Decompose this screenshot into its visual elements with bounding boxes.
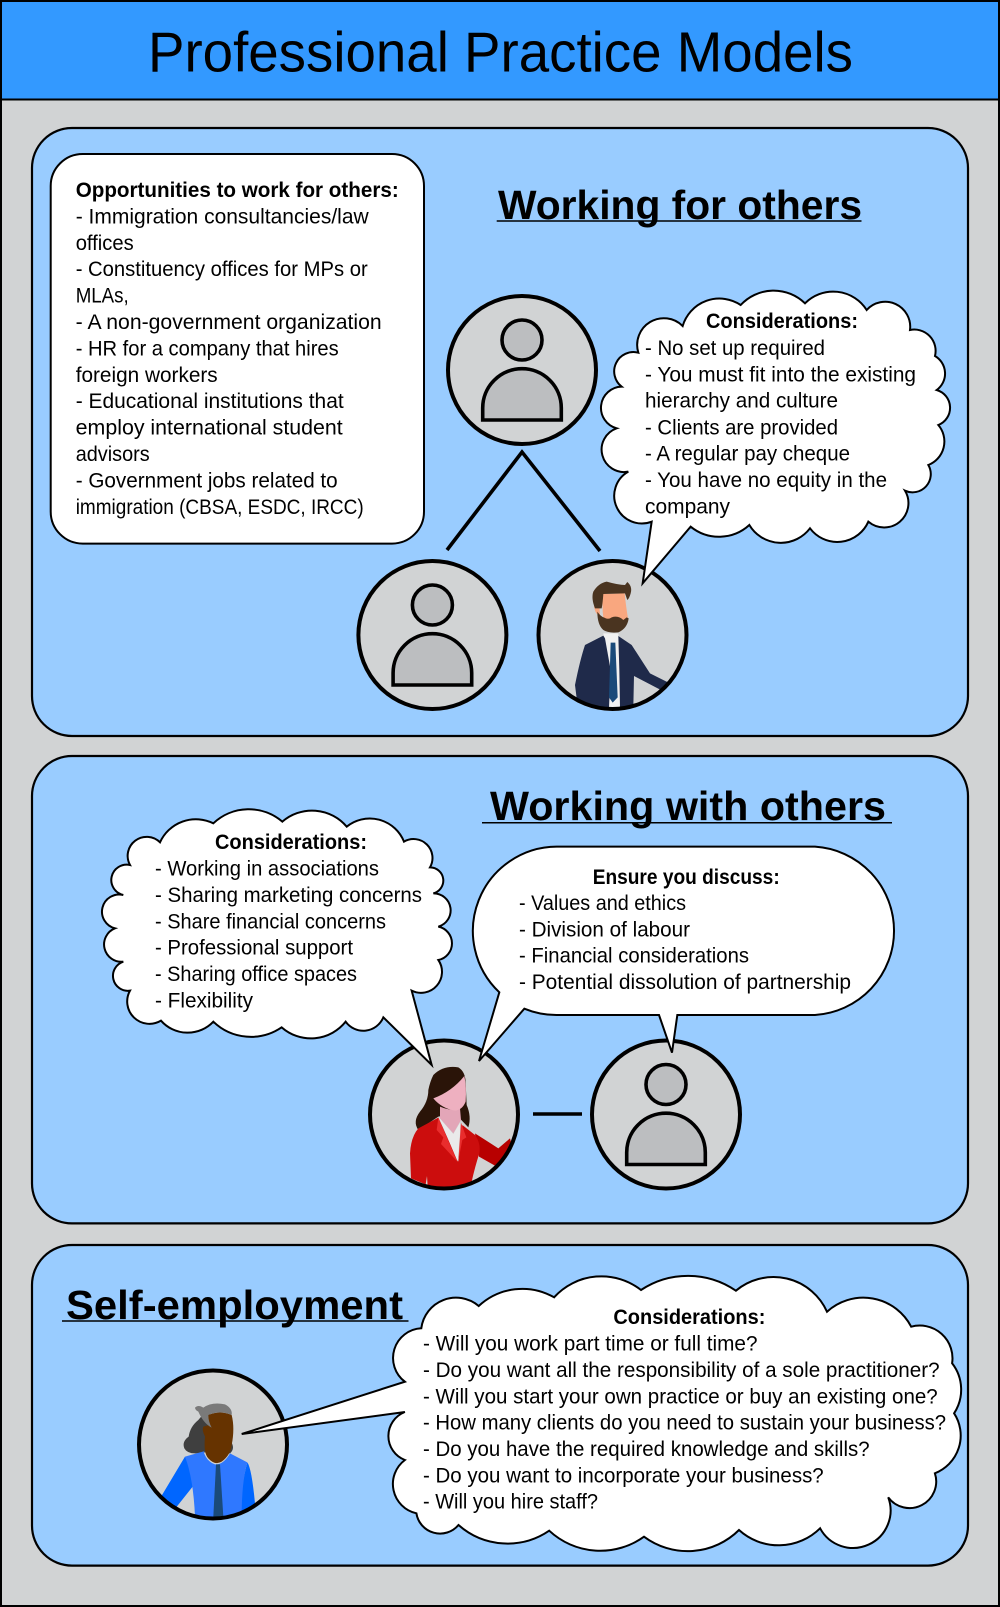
text box: opportunities to work for others: - Immigration consultancies/law bbox=[76, 205, 370, 228]
header banner bbox=[1, 1, 999, 100]
speech cloud: considerations working with others: - Working in associations bbox=[155, 858, 379, 881]
text box: opportunities to work for others bbox=[51, 154, 424, 544]
text box: opportunities to work for others: MLAs, bbox=[76, 285, 129, 308]
speech cloud: considerations working with others: - Professional support bbox=[155, 937, 353, 960]
icon: man in suit bbox=[536, 559, 688, 711]
speech cloud: considerations working for others: - No set up required bbox=[645, 337, 825, 360]
icon: self-employed person in blue bbox=[137, 1368, 289, 1520]
text box: opportunities to work for others: foreign workers bbox=[76, 364, 218, 387]
speech cloud: considerations working with others: - Share financial concerns bbox=[155, 910, 386, 933]
speech cloud: considerations self-employment: - Do you want to incorporate your business? bbox=[423, 1464, 824, 1487]
icon: woman in red jacket bbox=[368, 1038, 520, 1190]
text box: opportunities to work for others: Opportunities to work for others: bbox=[76, 179, 399, 202]
speech cloud: considerations self-employment: - Do you have the required knowledge and skills? bbox=[423, 1438, 870, 1461]
speech bubble: ensure you discuss: - Financial considerations bbox=[519, 945, 749, 968]
speech bubble: ensure you discuss bbox=[473, 847, 894, 1061]
speech cloud: considerations working for others: - A regular pay cheque bbox=[645, 443, 850, 466]
hierarchy connector lines bbox=[447, 452, 600, 551]
text box: opportunities to work for others: - Constituency offices for MPs or bbox=[76, 258, 368, 281]
text box: opportunities to work for others: - Educational institutions that bbox=[76, 390, 344, 413]
title: Professional Practice Models bbox=[148, 20, 853, 84]
speech cloud: considerations working for others: - You must fit into the existing bbox=[645, 364, 916, 387]
speech bubble: ensure you discuss: Ensure you discuss: bbox=[593, 866, 780, 889]
partner connector line bbox=[533, 1112, 582, 1116]
speech cloud: considerations working for others: - You have no equity in the bbox=[645, 469, 887, 492]
speech cloud: considerations working for others bbox=[601, 291, 950, 583]
text box: opportunities to work for others: immigration (CBSA, ESDC, IRCC) bbox=[76, 496, 364, 519]
speech cloud: considerations self-employment: - Do you want all the responsibility of a sole practitioner? bbox=[423, 1359, 940, 1382]
speech cloud: considerations working with others: - Sharing marketing concerns bbox=[155, 884, 422, 907]
speech cloud: considerations working for others: Considerations: bbox=[706, 310, 858, 333]
heading: self-employment: Self-employment bbox=[66, 1282, 403, 1328]
speech cloud: considerations self-employment: Considerations: bbox=[613, 1306, 765, 1329]
panel: self-employment bbox=[32, 1245, 968, 1566]
text box: opportunities to work for others: - Government jobs related to bbox=[76, 469, 338, 492]
heading: working with others: Working with others bbox=[490, 783, 886, 829]
speech bubble: ensure you discuss: - Potential dissolution of partnership bbox=[519, 971, 851, 994]
panel: working with others bbox=[32, 756, 968, 1223]
text box: opportunities to work for others: advisors bbox=[76, 443, 150, 466]
speech bubble: ensure you discuss: - Division of labour bbox=[519, 918, 690, 941]
speech cloud: considerations working for others: company bbox=[645, 495, 730, 518]
icon: manager person bbox=[446, 294, 598, 446]
text box: opportunities to work for others: employ international student bbox=[76, 417, 343, 440]
speech cloud: considerations working for others: hierarchy and culture bbox=[645, 390, 838, 413]
speech cloud: considerations self-employment: - Will you work part time or full time? bbox=[423, 1333, 758, 1356]
text box: opportunities to work for others: offices bbox=[76, 232, 134, 255]
icon: partner person bbox=[590, 1038, 742, 1190]
text box: opportunities to work for others: - A non-government organization bbox=[76, 311, 382, 334]
text box: opportunities to work for others: - HR for a company that hires bbox=[76, 337, 339, 360]
speech cloud: considerations working with others bbox=[102, 809, 452, 1065]
speech cloud: considerations working with others: - Flexibility bbox=[155, 989, 253, 1012]
panel: working for others bbox=[32, 128, 968, 736]
speech cloud: considerations working with others: - Sharing office spaces bbox=[155, 963, 357, 986]
speech cloud: considerations self-employment: - Will you start your own practice or buy an existing one? bbox=[423, 1385, 938, 1408]
speech cloud: considerations self-employment bbox=[242, 1276, 961, 1551]
speech cloud: considerations self-employment: - Will you hire staff? bbox=[423, 1491, 598, 1514]
heading: working for others: Working for others bbox=[498, 182, 862, 228]
speech cloud: considerations working with others: Considerations: bbox=[215, 831, 367, 854]
speech bubble: ensure you discuss: - Values and ethics bbox=[519, 892, 686, 915]
speech cloud: considerations self-employment: - How many clients do you need to sustain your business? bbox=[423, 1412, 946, 1435]
speech cloud: considerations working for others: - Clients are provided bbox=[645, 416, 838, 439]
icon: colleague person bbox=[356, 559, 508, 711]
